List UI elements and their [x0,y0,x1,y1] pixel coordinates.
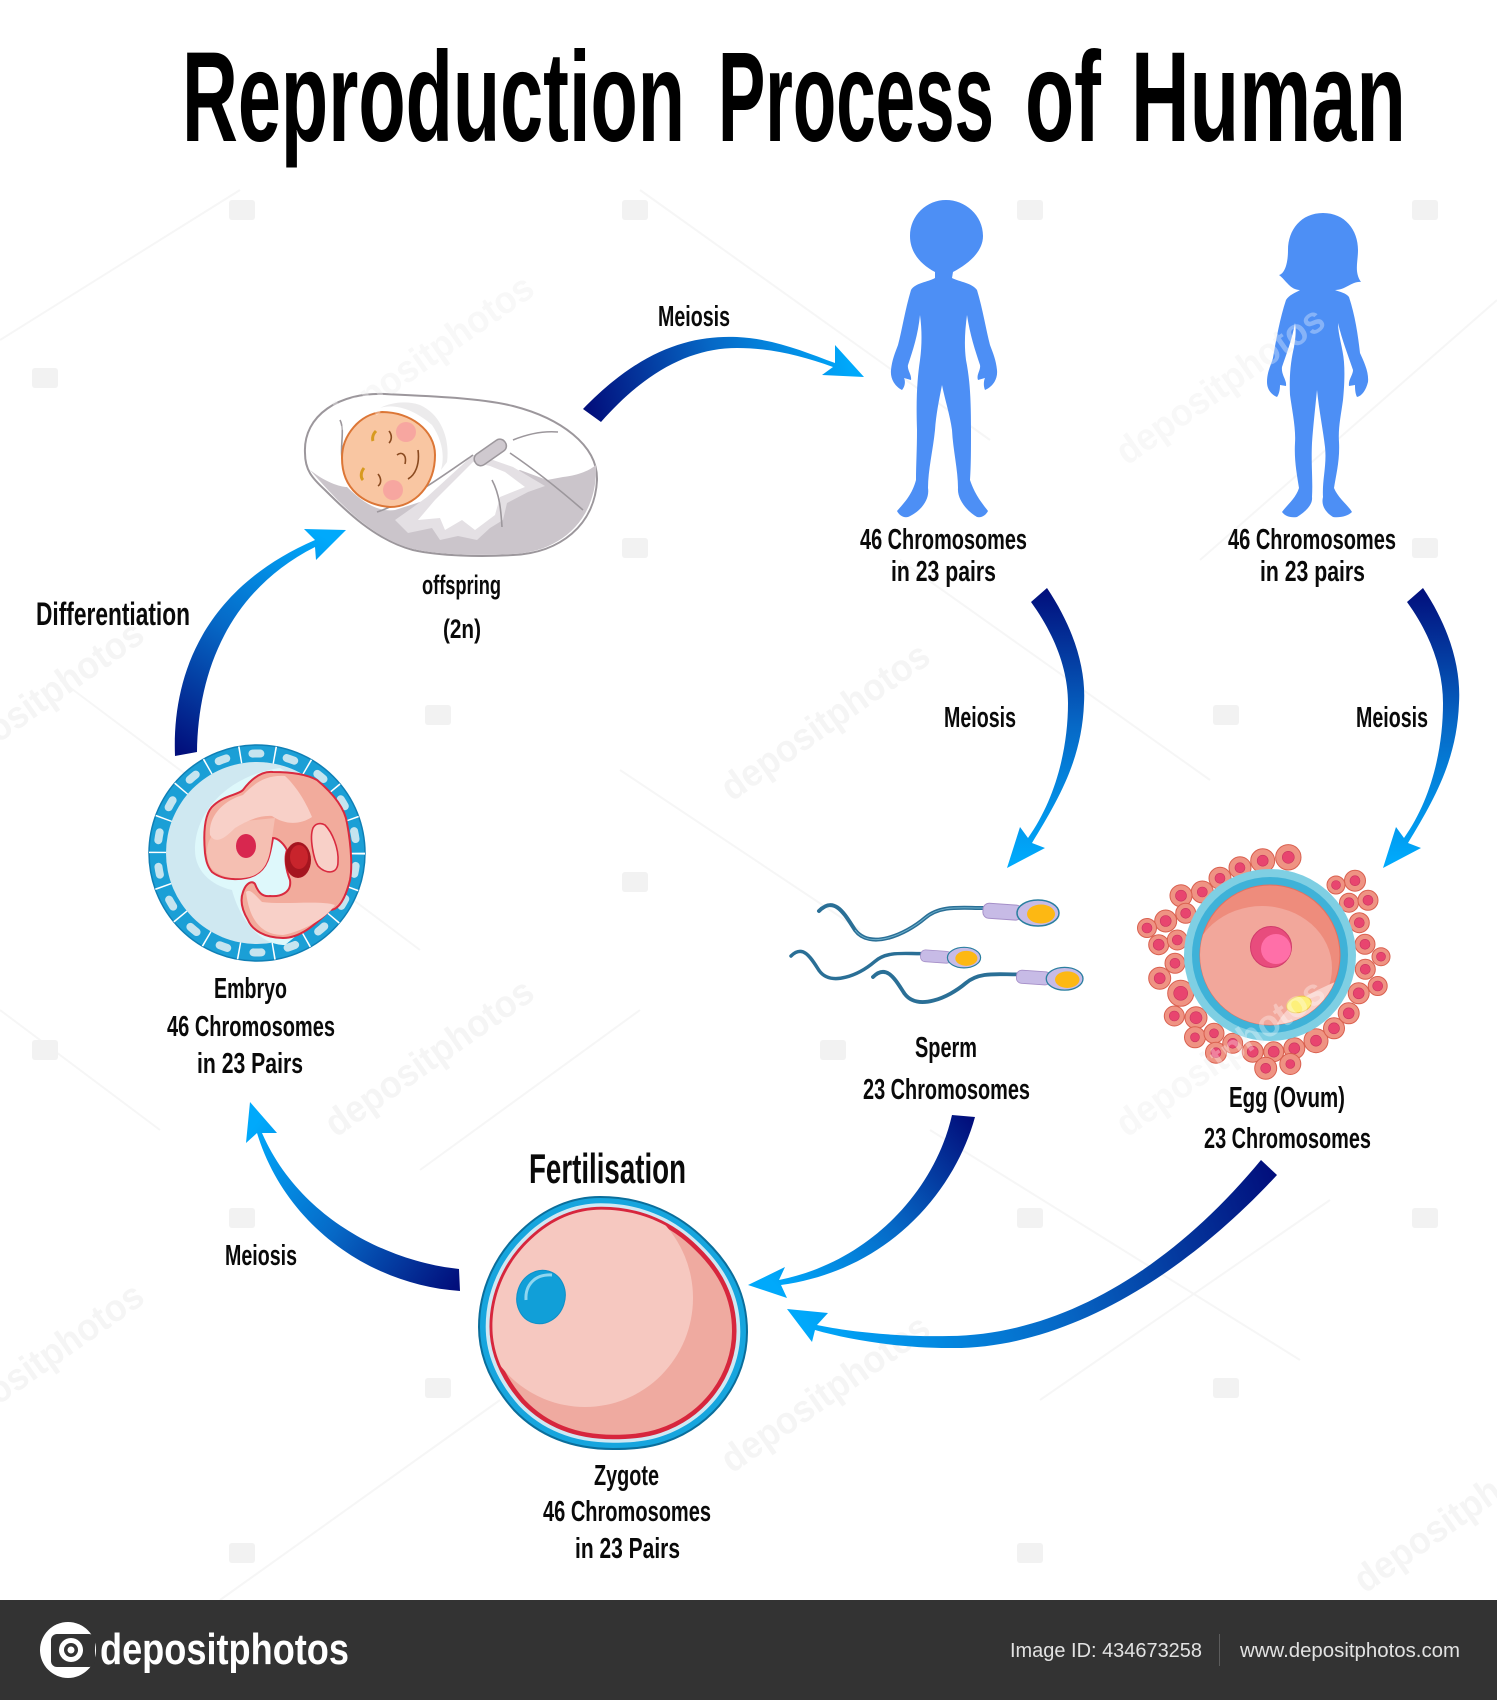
icon: embryo [149,745,365,961]
arrow: zygote to embryo [246,1102,460,1291]
watermark pattern: depositphotos [1108,970,1333,1145]
footer bar [0,1600,1497,1700]
label: meiosis left: Meiosis [225,1240,297,1272]
label: sperm: 23 Chromosomes [863,1074,1030,1106]
title: of [1025,26,1101,169]
arrow: female to egg [1383,588,1459,868]
label: differentiation: Differentiation [36,596,190,632]
label: female chromosomes: 46 Chromosomes [1228,524,1396,556]
label: zygote [543,1460,711,1565]
label: female chromosomes: in 23 pairs [1260,556,1365,588]
icon: male silhouette [891,200,997,517]
icon: baby offspring [305,394,597,556]
watermark pattern: depositphotos [1108,298,1333,473]
icon: sperm group [791,900,1083,1002]
icon: zygote [477,1189,747,1449]
egg surrounding cells [1138,845,1390,1079]
arrow: sperm to zygote [748,1115,975,1298]
label: zygote: in 23 Pairs [575,1533,680,1565]
sperm three [873,967,1083,1002]
watermark overlay on graphics: depositphotos [317,266,542,441]
label: zygote: Zygote [594,1460,659,1492]
label: meiosis male: Meiosis [944,702,1016,734]
footer image id: Image ID: 434673258 [1010,1640,1202,1662]
egg nucleus [1250,926,1292,968]
label: male chromosomes: in 23 pairs [891,556,996,588]
label: embryo: in 23 Pairs [197,1048,303,1080]
title: Process [718,26,994,169]
label: egg [1204,1082,1371,1155]
label: sperm [863,1032,1030,1106]
sperm two [791,947,981,979]
icon: egg ovum [1138,845,1390,1079]
title [182,26,1406,169]
label: offspring: offspring [422,570,501,600]
label: male chromosomes [860,524,1027,588]
watermark pattern: depositphotos [317,266,542,441]
footer url: www.depositphotos.com [1239,1640,1460,1662]
label: meiosis female: Meiosis [1356,702,1428,734]
watermark pattern: depositphotos [713,634,938,809]
arrow: offspring to male [583,337,864,422]
label: offspring [422,570,501,644]
watermark overlay on graphics [317,266,1333,1145]
zygote nucleus [510,1264,572,1330]
watermark pattern: depositphotos [713,1306,938,1481]
footer brand name: depositphotos [100,1625,349,1674]
watermark overlay on graphics: depositphotos [1108,970,1333,1145]
sperm one [819,900,1059,940]
watermark pattern: depositphotos [317,970,542,1145]
watermark overlay on graphics: depositphotos [1108,298,1333,473]
arrow: male to sperm [1007,588,1084,868]
label: male chromosomes: 46 Chromosomes [860,524,1027,556]
icon: female silhouette [1267,213,1368,517]
label: offspring: (2n) [443,614,481,644]
label: sperm: Sperm [915,1032,977,1064]
label: egg: 23 Chromosomes [1204,1123,1371,1155]
label: embryo: 46 Chromosomes [167,1011,335,1043]
label: embryo [167,973,335,1080]
label: zygote: 46 Chromosomes [543,1496,711,1528]
title: Reproduction [182,26,685,169]
label: meiosis top: Meiosis [658,301,730,333]
label: egg: Egg (Ovum) [1229,1082,1345,1114]
label: female chromosomes [1228,524,1396,588]
label: embryo: Embryo [214,973,287,1005]
heading: fertilisation: Fertilisation [529,1145,686,1192]
arrow: embryo to offspring [175,529,346,756]
icon: depositphotos logo [40,1622,96,1678]
arrow: egg to zygote [787,1160,1277,1348]
